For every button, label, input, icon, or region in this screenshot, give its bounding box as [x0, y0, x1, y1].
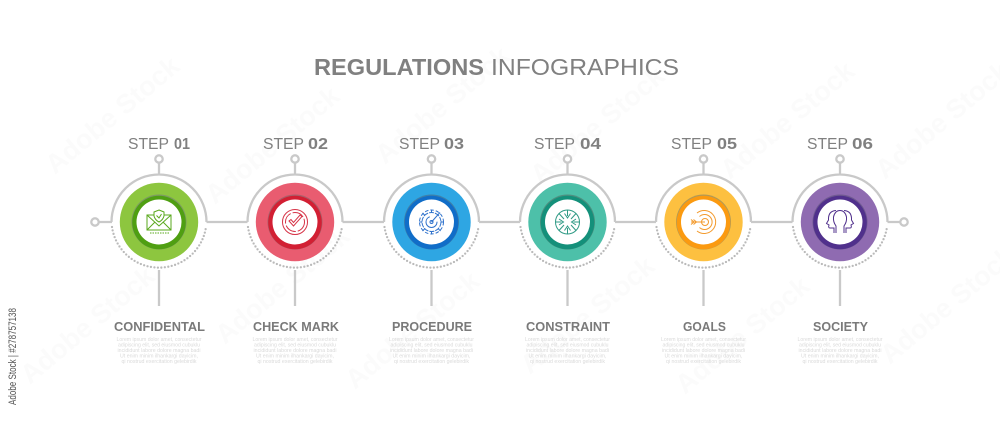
watermark: Adobe Stock: [670, 270, 816, 400]
step 01 badge: [120, 183, 198, 261]
step 06 label: 06: [852, 136, 873, 153]
watermark: Adobe Stock: [40, 50, 186, 180]
step 06 description: [798, 337, 883, 365]
step 03 badge: [392, 183, 471, 261]
step 03 frame: [384, 155, 479, 306]
step 06 description: adipiscing elit, sed eiusmod cubuklu: [799, 342, 881, 348]
watermark: Adobe Stock: [200, 80, 346, 210]
step 05 name: GOALS: [683, 320, 726, 334]
step 02 description: [252, 337, 338, 365]
step 03 description: Lorem ipsum dolor amet, consectetur: [389, 337, 474, 343]
icon: gear procedure: [419, 210, 444, 234]
step 02 description: Ut enim minim ilhankargi dayicim,: [256, 354, 334, 360]
step 05 badge: [664, 183, 743, 261]
step 04 badge: [528, 183, 607, 261]
step 03 label: STEP: [399, 136, 440, 153]
step 01 description: [116, 337, 202, 365]
icon: check mark: [282, 210, 308, 234]
step 04 frame: [520, 155, 615, 306]
step 06 description: Ut enim minim ilhankargi dayicim,: [801, 354, 879, 360]
stock id caption: Adobe Stock | #278757138: [7, 308, 19, 405]
icon: target with arrow: [691, 210, 716, 234]
step 01 description: Ut enim minim ilhankargi dayicim,: [120, 354, 198, 360]
step 03 description: qi nostrud exercitation gelebirdik: [394, 359, 470, 365]
watermark: Adobe Stock: [210, 220, 356, 350]
step 04 name: CONSTRAINT: [526, 320, 610, 334]
step 01 description: incididunt labore dolore magna badi: [118, 348, 200, 354]
step 05 description: qi nostrud exercitation gelebirdik: [666, 359, 742, 365]
step 03 description: incididunt labore dolore magna badi: [390, 348, 473, 354]
step 05 label: STEP: [671, 136, 712, 153]
step 03 description: Ut enim minim ilhankargi dayicim,: [392, 354, 470, 360]
step 01: [112, 136, 206, 365]
step 03 name: PROCEDURE: [392, 320, 472, 334]
step 01 description: Lorem ipsum dolor amet, consectetur: [116, 337, 202, 343]
step 02 badge: [256, 183, 334, 261]
step 06 description: Lorem ipsum dolor amet, consectetur: [798, 337, 883, 343]
step 05 description: incididunt labore dolore magna badi: [662, 348, 745, 354]
icon: secure envelope: [147, 210, 171, 233]
watermark: Adobe Stock: [370, 40, 516, 170]
step 05 description: [661, 337, 746, 365]
step 03 description: [389, 337, 474, 365]
step 04: [520, 136, 615, 365]
step 06 frame: [792, 155, 888, 306]
step 04 description: Lorem ipsum dolor amet, consectetur: [525, 337, 610, 343]
step 05 frame: [656, 155, 751, 306]
step 03 label: 03: [444, 136, 464, 153]
step 06 label: STEP: [807, 136, 848, 153]
watermark: Adobe Stock: [715, 55, 861, 185]
step 01 label: 01: [174, 136, 190, 153]
step 06 description: qi nostrud exercitation gelebirdik: [802, 359, 878, 365]
step 02 label: 02: [308, 136, 328, 153]
step 05 label: 05: [717, 136, 737, 153]
step 05 description: Lorem ipsum dolor amet, consectetur: [661, 337, 746, 343]
step 04 label: STEP: [534, 136, 575, 153]
title: REGULATIONS: [314, 54, 484, 80]
title: INFOGRAPHICS: [491, 54, 679, 80]
step 01 description: adipiscing elit, sed eiusmod cubuklu: [118, 342, 200, 348]
step 05 description: adipiscing elit, sed eiusmod cubuklu: [662, 342, 745, 348]
step 02 description: incididunt labore dolore magna badi: [254, 348, 336, 354]
step 03: [384, 136, 479, 365]
step 04 description: [525, 337, 610, 365]
step 02 label: STEP: [263, 136, 304, 153]
watermark: Adobe Stock: [15, 260, 161, 390]
step 03 description: adipiscing elit, sed eiusmod cubuklu: [390, 342, 473, 348]
title: [314, 54, 679, 80]
watermark: Adobe Stock: [515, 250, 661, 380]
step 05: [656, 136, 751, 365]
step 04 description: incididunt labore dolore magna badi: [526, 348, 609, 354]
step 02 description: Lorem ipsum dolor amet, consectetur: [252, 337, 338, 343]
step 01 label: STEP: [128, 136, 169, 153]
step 02 description: adipiscing elit, sed eiusmod cubuklu: [254, 342, 336, 348]
watermark: Adobe Stock: [525, 60, 671, 190]
step 01 description: qi nostrud exercitation gelebirdik: [122, 359, 197, 365]
step 04 description: adipiscing elit, sed eiusmod cubuklu: [526, 342, 609, 348]
step 06 description: incididunt labore dolore magna badi: [798, 348, 882, 354]
step 02 name: CHECK MARK: [253, 320, 339, 334]
watermark: Adobe Stock: [340, 265, 486, 395]
timeline connector: [91, 218, 908, 226]
icon: constraint arrows: [556, 210, 580, 234]
step 01 name: CONFIDENTAL: [114, 320, 205, 334]
step 06 badge: [801, 183, 879, 261]
step 02: [248, 136, 342, 365]
step 01 frame: [112, 155, 206, 306]
step 04 label: 04: [580, 136, 601, 153]
step 02 frame: [248, 155, 342, 306]
step 06 name: SOCIETY: [813, 320, 869, 334]
step 05 description: Ut enim minim ilhankargi dayicim,: [664, 354, 742, 360]
step 04 description: Ut enim minim ilhankargi dayicim,: [528, 354, 606, 360]
step 06: [792, 136, 888, 365]
step 04 description: qi nostrud exercitation gelebirdik: [530, 359, 606, 365]
step 02 description: qi nostrud exercitation gelebirdik: [258, 359, 333, 365]
icon: two heads: [826, 210, 854, 233]
